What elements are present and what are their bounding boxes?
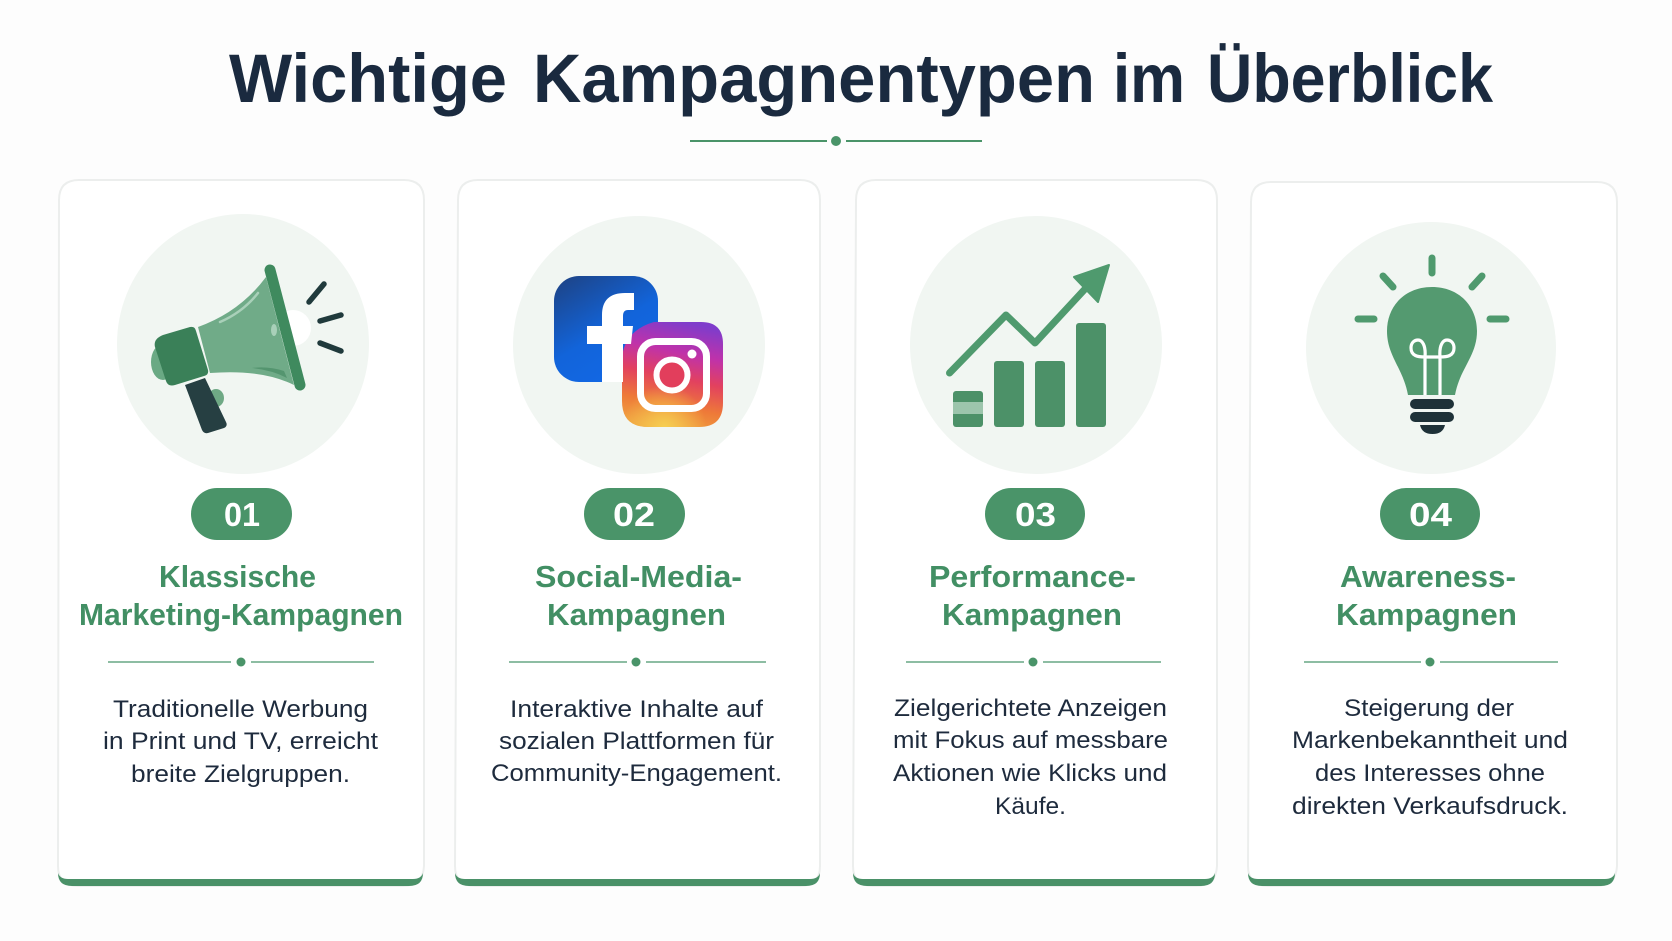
number badge 03: 03 <box>1015 496 1056 533</box>
card 1 description: breite Zielgruppen. <box>131 761 350 788</box>
card 4 icon circle <box>1306 222 1556 474</box>
card 2 heading: Social-Media- <box>535 559 742 594</box>
title: Wichtige <box>229 40 507 117</box>
panel: card 2 <box>455 180 820 886</box>
card 4 description: Markenbekanntheit und <box>1292 727 1568 754</box>
card 4 heading <box>1336 559 1517 632</box>
card 3 description: mit Fokus auf messbare <box>893 727 1168 754</box>
title <box>229 40 1494 117</box>
number badge 01 <box>191 488 292 540</box>
icon: megaphone <box>151 270 341 433</box>
number badge 04 <box>1380 488 1480 540</box>
card 4 heading: Kampagnen <box>1336 597 1517 632</box>
card 4 heading: Awareness- <box>1340 559 1516 594</box>
number badge 02: 02 <box>613 496 655 533</box>
card 3 background <box>853 180 1217 886</box>
card 2 heading <box>535 559 742 632</box>
card 4 bottom accent <box>1248 873 1615 886</box>
card 2 description <box>491 696 782 787</box>
number badge 03 <box>985 488 1085 540</box>
title: Überblick <box>1207 40 1494 117</box>
card 1 bottom accent <box>58 873 423 886</box>
card 1 description <box>103 696 378 788</box>
number badge 02 <box>584 488 685 540</box>
card 3 heading: Performance- <box>929 559 1136 594</box>
title divider <box>690 136 982 146</box>
card 4 background <box>1248 182 1617 886</box>
card 3 description: Käufe. <box>995 793 1066 820</box>
card 3 icon circle <box>910 216 1162 474</box>
card 3 description <box>893 695 1168 820</box>
card 2 bottom accent <box>455 873 820 886</box>
card 4 description: Steigerung der <box>1344 695 1514 722</box>
card 4 description: direkten Verkaufsdruck. <box>1292 793 1568 820</box>
card 2 description: Interaktive Inhalte auf <box>510 696 763 723</box>
card 3 bottom accent <box>853 873 1215 886</box>
card 4 description: des Interesses ohne <box>1315 760 1545 787</box>
icon: facebook and instagram logos <box>554 276 723 427</box>
card 1 heading <box>79 559 403 632</box>
icon: light bulb <box>1358 258 1506 434</box>
card 1 background <box>58 180 424 886</box>
number badge 01: 01 <box>224 496 260 533</box>
panel: card 3 <box>853 180 1217 886</box>
card 2 description: sozialen Plattformen für <box>499 728 774 755</box>
number badge 04: 04 <box>1409 496 1453 533</box>
card 1 description: in Print und TV, erreicht <box>103 728 378 755</box>
card 2 description: Community-Engagement. <box>491 760 782 787</box>
card 4 description <box>1292 695 1568 820</box>
card 3 description: Aktionen wie Klicks und <box>893 760 1167 787</box>
panel: card 4 <box>1248 182 1617 886</box>
icon: growth bar chart with arrow <box>950 265 1109 427</box>
card 2 background <box>455 180 820 886</box>
card 2 heading: Kampagnen <box>547 597 726 632</box>
card 1 description: Traditionelle Werbung <box>113 696 368 723</box>
panel: card 1 <box>58 180 424 886</box>
card 1 icon circle <box>117 214 369 474</box>
card 3 heading <box>929 559 1136 632</box>
card 3 description: Zielgerichtete Anzeigen <box>894 695 1167 722</box>
card 1 heading: Klassische <box>159 559 316 594</box>
title: Kampagnentypen <box>533 40 1095 117</box>
card 3 heading: Kampagnen <box>942 597 1122 632</box>
title: im <box>1113 40 1185 117</box>
card 2 icon circle <box>513 216 765 474</box>
card 1 heading: Marketing-Kampagnen <box>79 597 403 632</box>
